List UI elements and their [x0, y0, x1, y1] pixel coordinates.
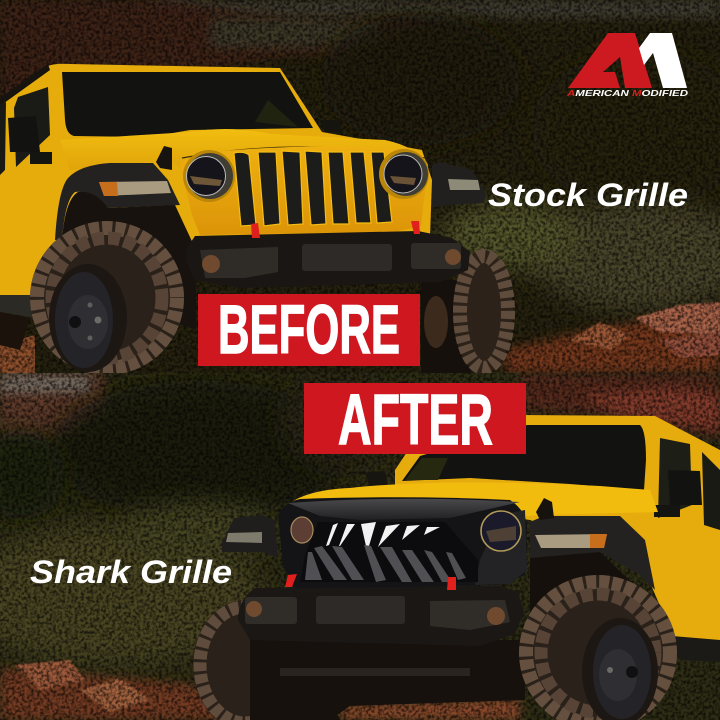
banner: after: AFTER: [338, 381, 493, 460]
side window and mirror: [14, 87, 50, 167]
logo wordmark: A MERICAN M ODIFIED: [566, 89, 688, 98]
background: off-road scenery: [0, 0, 720, 373]
windshield: [402, 425, 646, 490]
left tire: [30, 221, 184, 375]
banner: before: [198, 291, 420, 368]
jeep: stock grille: [0, 64, 513, 375]
grille slots: [234, 151, 392, 226]
logo: American Modified: [566, 33, 688, 98]
grille face: [180, 146, 428, 235]
bumper: [186, 231, 470, 288]
jeep body: [395, 415, 720, 640]
fender flares: [222, 515, 278, 558]
red tow hooks: [251, 221, 420, 238]
right tire: [421, 250, 513, 375]
side windows and mirror: [658, 438, 692, 518]
panel: after photo: [0, 370, 720, 720]
grille shell: [278, 497, 527, 590]
windshield: [62, 72, 313, 137]
right tire: [519, 575, 677, 720]
bumper: [238, 586, 524, 646]
headlights: [291, 511, 521, 551]
hood: [60, 129, 428, 165]
panel: before photo: [0, 0, 720, 375]
label: shark grille: Shark Grille: [30, 554, 232, 590]
banner: before: BEFORE: [218, 291, 400, 368]
banner: after: [304, 381, 526, 460]
jeep body: [0, 64, 432, 300]
label: stock grille: Stock Grille: [488, 177, 688, 213]
background: off-road scenery: [0, 370, 720, 720]
headlights: [183, 149, 429, 202]
left tire: [193, 600, 340, 720]
underbody: [301, 640, 525, 715]
hood: [282, 482, 658, 516]
shark teeth grille: [300, 522, 478, 582]
grey hood cap: [288, 499, 520, 520]
hood latches and fender flares: [156, 146, 172, 170]
logo mark: [568, 33, 687, 88]
red tow hooks: [285, 574, 456, 590]
jeep: shark grille: [193, 415, 720, 720]
